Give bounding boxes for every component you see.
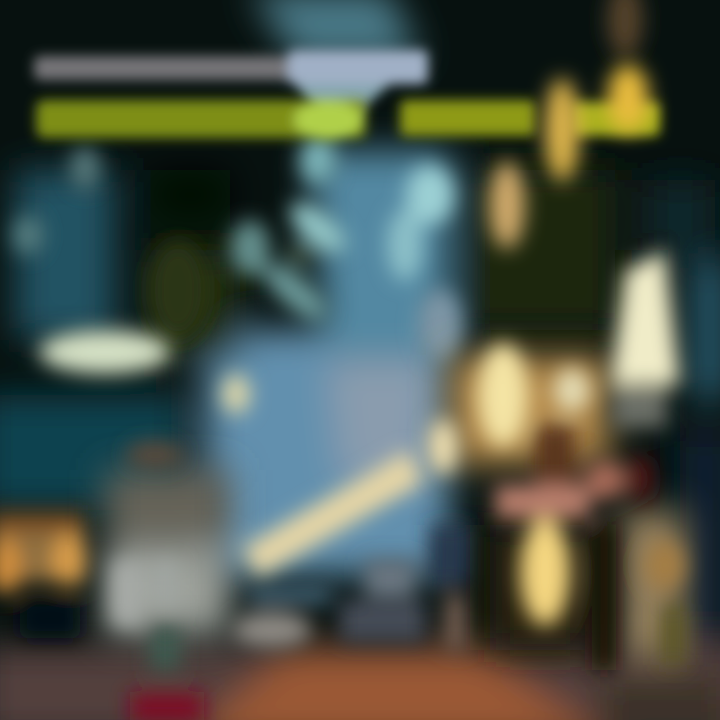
right building and shopfront (450, 355, 685, 660)
kiosk (105, 470, 230, 635)
title bars (34, 50, 660, 182)
title line 2 (36, 100, 660, 140)
hanging lanterns (489, 0, 643, 249)
lanterns over title (544, 64, 649, 182)
left building and storefront (0, 330, 250, 638)
street vehicle and mid-ground (232, 525, 470, 650)
title line 1 (34, 50, 428, 125)
sky highlights (13, 136, 462, 361)
diagonal light beam (242, 450, 424, 578)
